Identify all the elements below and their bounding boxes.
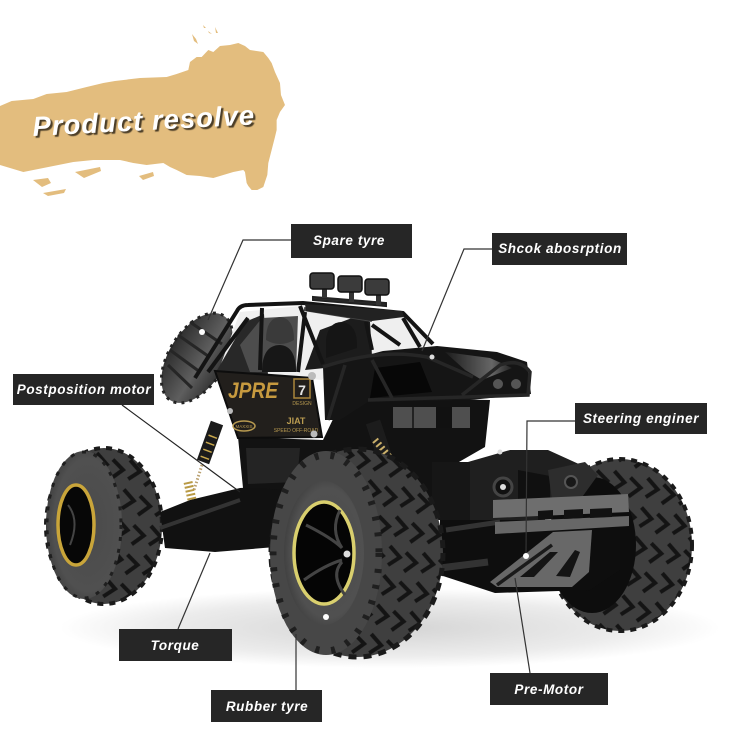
door panel with logo: MAXXIS bbox=[235, 424, 253, 429]
callout: Shcok abosrption bbox=[422, 233, 627, 351]
callout: Steering enginer bbox=[523, 403, 707, 559]
cabin interior bbox=[218, 306, 432, 380]
callout: Spare tyre bbox=[199, 224, 412, 335]
ground shadow bbox=[60, 588, 720, 668]
front cage bar bbox=[323, 354, 530, 420]
rear chassis bbox=[160, 485, 300, 552]
roof bbox=[305, 304, 404, 321]
door panel with logo: DESIGN bbox=[292, 401, 312, 407]
lower front chassis bbox=[440, 520, 620, 593]
brush banner bbox=[0, 25, 285, 196]
callout: Pre-Motor: Pre-Motor bbox=[514, 682, 584, 697]
front shock bbox=[373, 422, 390, 458]
skid plate bbox=[490, 530, 592, 587]
bumper bbox=[490, 494, 629, 587]
callout: Rubber tyre: Rubber tyre bbox=[226, 699, 308, 714]
rear right tyre (far side) bbox=[548, 459, 692, 631]
rim bbox=[58, 485, 94, 565]
badge 7 bbox=[294, 379, 310, 398]
cage tubes bbox=[195, 303, 433, 378]
spare tyre bbox=[147, 301, 247, 415]
roof lights bbox=[310, 273, 389, 306]
rim bbox=[294, 502, 354, 604]
under-body mass bbox=[238, 398, 490, 520]
callout: Shcok abosrption: Shcok abosrption bbox=[498, 241, 622, 256]
callout: Postposition motor bbox=[13, 374, 240, 492]
front left tyre bbox=[270, 449, 443, 657]
front gearbox bbox=[432, 450, 598, 530]
rear shock bbox=[188, 423, 217, 500]
door panel with logo: JIAT bbox=[287, 416, 306, 426]
callout: Steering enginer: Steering enginer bbox=[583, 411, 699, 426]
door panel with logo bbox=[215, 371, 322, 438]
callout: Postposition motor: Postposition motor bbox=[17, 382, 151, 397]
door panel with logo: 7 bbox=[298, 382, 306, 398]
driver helmets bbox=[262, 317, 357, 372]
hood bbox=[323, 346, 531, 420]
callout: Torque bbox=[119, 553, 232, 661]
callout: Spare tyre: Spare tyre bbox=[313, 233, 385, 248]
engine block bbox=[393, 407, 470, 428]
callout: Rubber tyre bbox=[211, 614, 329, 722]
rear left tyre bbox=[46, 448, 162, 604]
heading: Product resolve: Product resolve bbox=[32, 99, 256, 142]
callout: Torque: Torque bbox=[151, 638, 199, 653]
logo JPRE: JPRE bbox=[228, 378, 279, 403]
car bbox=[46, 273, 692, 657]
callout: Pre-Motor bbox=[490, 578, 608, 705]
door panel with logo: SPEED OFF-ROAD bbox=[274, 428, 319, 434]
